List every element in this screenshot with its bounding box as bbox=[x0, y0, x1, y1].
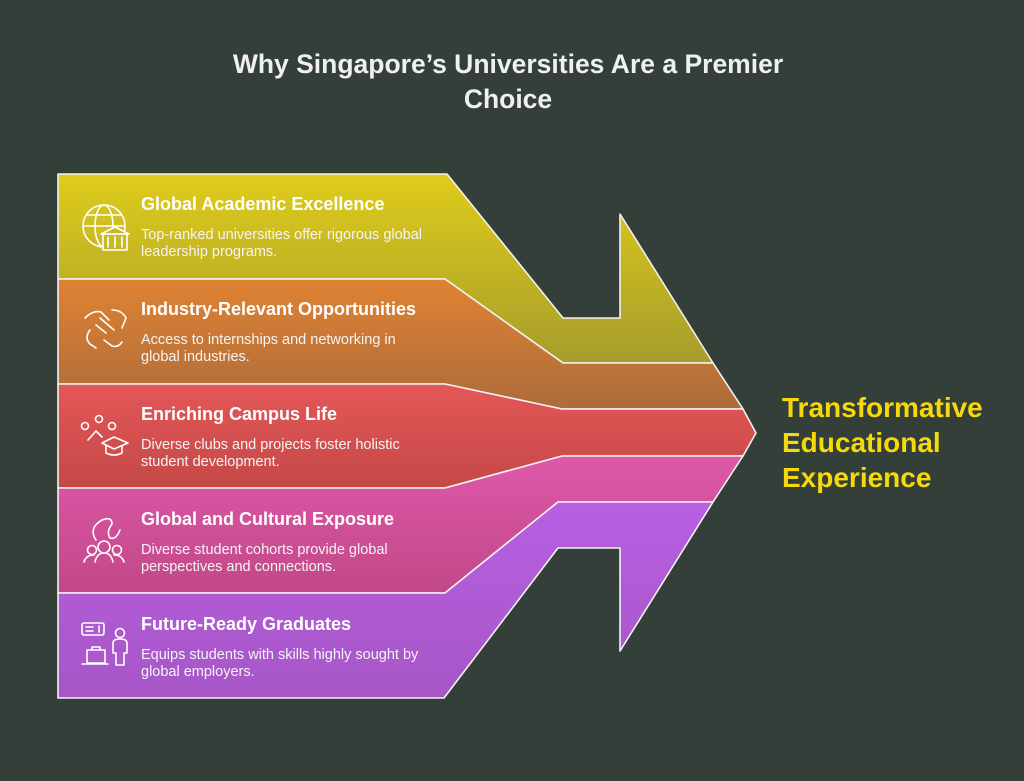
panel text: Global Academic Excellence: Top-ranked universities offer rigorous global leadership programs. bbox=[141, 227, 422, 260]
panel text: Global and Cultural Exposure bbox=[141, 509, 394, 575]
title: Why Singapore’s Universities Are a Premier Choice bbox=[233, 49, 783, 114]
panel text: Future-Ready Graduates: Equips students with skills highly sought by global employers. bbox=[141, 647, 418, 680]
outcome label: Educational bbox=[782, 427, 941, 458]
outcome label bbox=[782, 392, 983, 493]
panel text: Enriching Campus Life: Enriching Campus Life bbox=[141, 404, 337, 424]
panel text: Future-Ready Graduates bbox=[141, 614, 418, 680]
band: pink bbox=[58, 456, 743, 593]
icon: diverse cohort bbox=[84, 519, 124, 562]
band: red bbox=[58, 384, 756, 488]
band: orange bbox=[58, 279, 743, 409]
icon: job candidate bbox=[82, 623, 127, 665]
panel text: Global Academic Excellence: Global Academic Excellence bbox=[141, 194, 384, 214]
panel text: Enriching Campus Life bbox=[141, 404, 400, 470]
icon: handshake bbox=[85, 310, 126, 348]
panel text: Global and Cultural Exposure: Diverse student cohorts provide global perspectives and connections. bbox=[141, 542, 388, 575]
panel text: Industry-Relevant Opportunities: Industry-Relevant Opportunities bbox=[141, 299, 416, 319]
panel text: Enriching Campus Life: Diverse clubs and projects foster holistic student development. bbox=[141, 437, 400, 470]
icon: people and graduation cap bbox=[82, 416, 128, 455]
icon: globe with building bbox=[83, 205, 129, 250]
panel text: Future-Ready Graduates: Future-Ready Graduates bbox=[141, 614, 351, 634]
band: purple bbox=[58, 502, 713, 698]
panel text: Global Academic Excellence bbox=[141, 194, 422, 260]
panel text: Industry-Relevant Opportunities bbox=[141, 299, 416, 365]
panel text: Global and Cultural Exposure: Global and Cultural Exposure bbox=[141, 509, 394, 529]
outcome label: Experience bbox=[782, 462, 931, 493]
panel text: Industry-Relevant Opportunities: Access to internships and networking in global industries. bbox=[141, 332, 396, 365]
outcome label: Transformative bbox=[782, 392, 983, 423]
band: yellow bbox=[58, 174, 713, 363]
